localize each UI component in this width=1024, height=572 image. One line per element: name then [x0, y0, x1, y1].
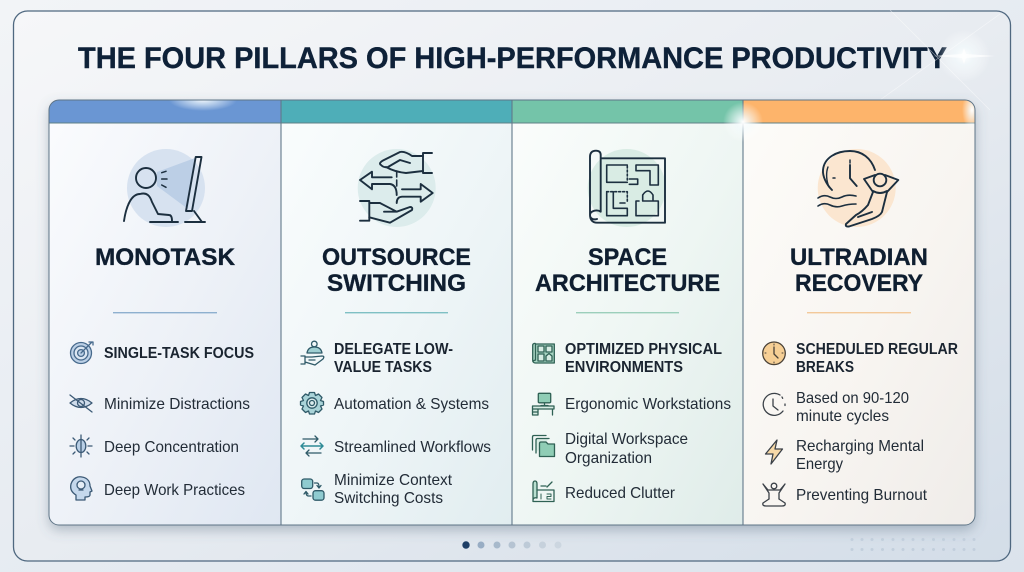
- list item: scheduled regular breaks: SCHEDULED REGULAR: [796, 341, 958, 358]
- pillar: ultradian recovery: [763, 149, 958, 506]
- heading: ultradian recovery: RECOVERY: [795, 270, 923, 297]
- list item: deep concentration: [70, 435, 239, 457]
- list item: delegate low-value tasks: VALUE TASKS: [334, 359, 432, 376]
- heading: outsource switching: [322, 244, 471, 297]
- list item: recharging mental energy: [766, 438, 924, 473]
- pillar: outsource switching: [300, 149, 491, 507]
- list item: recharging mental energy: Recharging Mental: [796, 438, 924, 455]
- pillar: monotask: [70, 149, 254, 500]
- heading: outsource switching: OUTSOURCE: [322, 244, 471, 271]
- heading: ultradian recovery: ULTRADIAN: [790, 244, 928, 271]
- header bar: monotask: [49, 100, 281, 123]
- list item: optimized physical environments: [533, 341, 722, 376]
- header bar: space: [512, 100, 743, 123]
- list item: based on 90-120 minute cycles: [763, 390, 909, 425]
- list item: minimize context switching costs: Minimize Context: [334, 472, 453, 489]
- icon: hands exchanging arrows: [358, 149, 436, 227]
- list item: recharging mental energy: Energy: [796, 456, 843, 473]
- list item: delegate low-value tasks: DELEGATE LOW-: [334, 341, 453, 358]
- panel: pillars table: [49, 89, 982, 525]
- list item: reduced clutter: [533, 481, 676, 502]
- decorative dot grid: [850, 538, 976, 551]
- list item: digital workspace organization: Digital Workspace: [565, 431, 688, 448]
- list item: deep concentration: Deep Concentration: [104, 439, 239, 456]
- list item: scheduled regular breaks: BREAKS: [796, 359, 854, 376]
- sparkle: top right: [880, 10, 1000, 110]
- list item: streamlined workflows: [301, 436, 491, 456]
- list item: based on 90-120 minute cycles: minute cycles: [796, 408, 889, 425]
- list item: preventing burnout: [763, 483, 928, 506]
- heading: space architecture: SPACE: [588, 244, 667, 271]
- icon: person focused on monitor: [124, 149, 205, 227]
- divider: [576, 312, 679, 313]
- list item: minimize context switching costs: Switching Costs: [334, 490, 443, 507]
- list item: streamlined workflows: Streamlined Workflows: [334, 439, 491, 456]
- list item: automation and systems: [300, 392, 489, 414]
- icon: clock and relaxing person: [818, 149, 898, 227]
- list item: ergonomic workstations: [532, 393, 731, 415]
- list item: single-task focus: SINGLE-TASK FOCUS: [104, 345, 254, 362]
- title: THE FOUR PILLARS OF HIGH-PERFORMANCE PRODUCTIVITY: [78, 42, 947, 75]
- heading: monotask: MONOTASK: [95, 244, 235, 271]
- heading: ultradian recovery: [790, 244, 928, 297]
- panel: outsource column background: [281, 100, 512, 525]
- list item: digital workspace organization: Organization: [565, 450, 652, 467]
- list item: minimize distractions: Minimize Distractions: [104, 396, 250, 413]
- list item: single-task focus: [70, 342, 254, 364]
- list item: reduced clutter: Reduced Clutter: [565, 485, 676, 502]
- header bar: outsource: [281, 100, 512, 123]
- list item: deep work practices: [71, 477, 245, 500]
- panel: space column background: [512, 100, 743, 525]
- list item: automation and systems: Automation & Systems: [334, 396, 489, 413]
- header bar: recovery: [743, 100, 975, 123]
- heading: outsource switching: SWITCHING: [327, 270, 466, 297]
- heading: space architecture: ARCHITECTURE: [535, 270, 720, 297]
- pillar: space architecture: [532, 149, 731, 502]
- list item: scheduled regular breaks: [763, 341, 958, 376]
- heading: space architecture: [535, 244, 720, 297]
- list item: minimize context switching costs: [302, 472, 453, 507]
- list item: digital workspace organization: [532, 431, 688, 467]
- divider: [807, 312, 911, 313]
- list item: deep work practices: Deep Work Practices: [104, 482, 245, 499]
- divider: [113, 312, 217, 313]
- list item: ergonomic workstations: Ergonomic Workstations: [565, 396, 731, 413]
- icon: floor plan blueprint: [588, 149, 666, 227]
- pagination dots: [462, 541, 562, 549]
- list item: delegate low-value tasks: [301, 341, 453, 376]
- list item: optimized physical environments: ENVIRONMENTS: [565, 359, 683, 376]
- divider: [345, 312, 448, 313]
- list item: preventing burnout: Preventing Burnout: [796, 487, 928, 504]
- panel: monotask column background: [49, 100, 281, 525]
- panel: recovery column background: [743, 100, 975, 525]
- list item: optimized physical environments: OPTIMIZED PHYSICAL: [565, 341, 722, 358]
- list item: based on 90-120 minute cycles: Based on 90-120: [796, 390, 909, 407]
